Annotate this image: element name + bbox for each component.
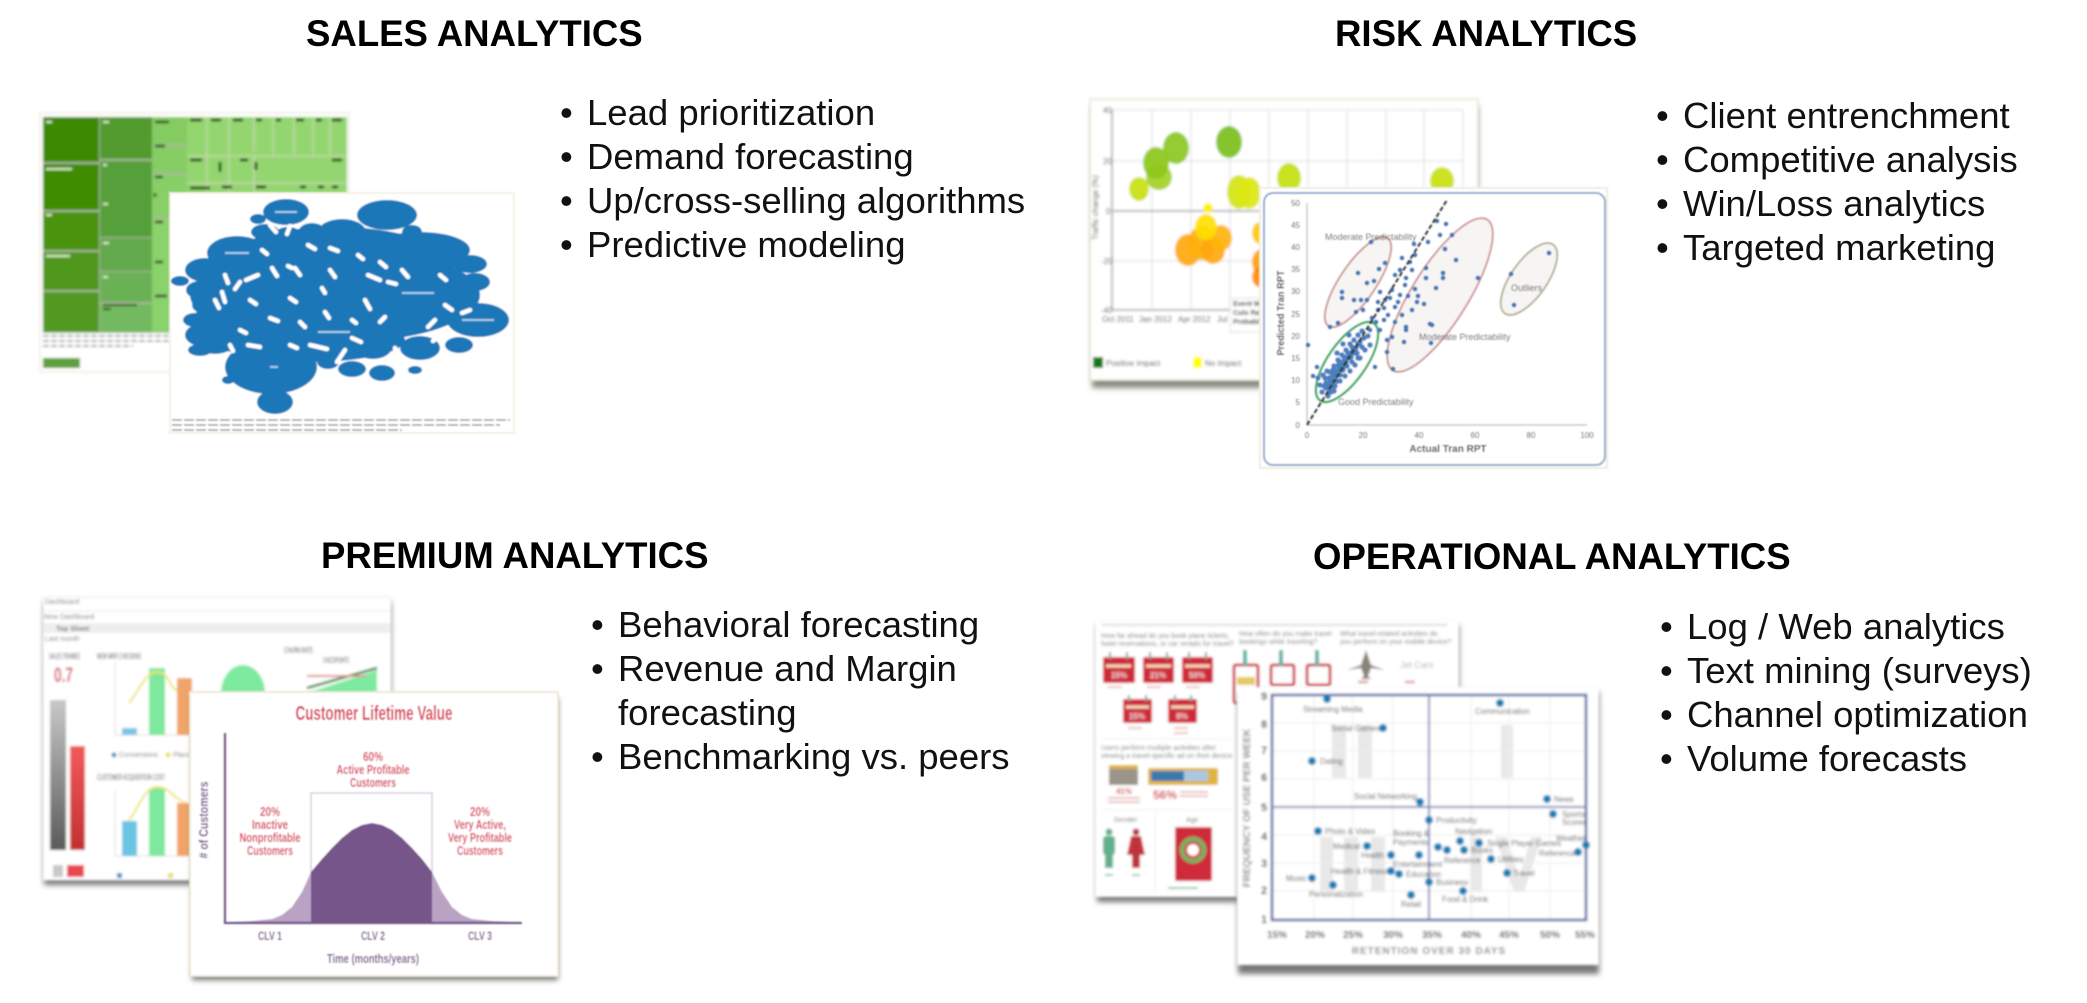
panel: operational infographic screenshot: Jet Cars: [1400, 660, 1434, 670]
bullet list: operational analytics: [1660, 606, 2032, 779]
panel: premium dashboard screenshot: Plans: [173, 752, 191, 759]
bullet list: sales analytics: •: [560, 180, 573, 221]
panel: operational infographic screenshot: How often do you make travel: [1239, 631, 1332, 638]
panel: risk scatter plot: 20: [1291, 332, 1301, 341]
panel: risk scatter plot: 80: [1527, 431, 1536, 440]
bullet list: premium analytics: •: [591, 736, 604, 777]
panel: operational infographic screenshot: 50%: [1189, 671, 1205, 680]
panel: risk bubble chart: Probabil: [1233, 319, 1261, 326]
panel: customer lifetime value chart: Active Profitable: [336, 762, 410, 777]
panel: risk scatter plot: 15: [1291, 354, 1301, 363]
bullet list: sales analytics: [560, 92, 1025, 265]
bullet list: sales analytics: •: [560, 224, 573, 265]
panel: operational infographic screenshot: 15%: [1111, 671, 1127, 680]
panel: operational quadrant chart: 6: [1261, 772, 1267, 784]
panel: operational infographic screenshot: viewing a travel-specific ad on their device: [1101, 753, 1232, 760]
panel: operational quadrant chart: 50%: [1540, 930, 1560, 941]
panel: premium dashboard screenshot: NEW MRR CHECKINS: [97, 652, 141, 661]
heading: operational analytics: OPERATIONAL ANALYTICS: [1313, 536, 1791, 577]
panel: operational quadrant chart: FREQUENCY OF USE PER WEEK: [1242, 728, 1253, 887]
panel: operational quadrant chart: 30%: [1383, 930, 1403, 941]
panel: operational infographic screenshot: Age: [1186, 817, 1199, 824]
panel: operational quadrant chart: 3: [1261, 858, 1267, 870]
bullet list: sales analytics: •: [560, 136, 573, 177]
panel: operational infographic screenshot: 41%: [1116, 787, 1132, 796]
panel: risk scatter plot: Good Predictability: [1338, 397, 1414, 407]
panel: risk scatter plot: 40: [1415, 431, 1424, 440]
panel: customer lifetime value chart: CLV 1: [258, 929, 282, 943]
panel: operational quadrant chart: Medical: [1333, 842, 1360, 851]
bullet list: premium analytics: Revenue and Margin: [618, 648, 957, 689]
panel: operational quadrant chart: Utilities: [1498, 855, 1523, 864]
bullet list: operational analytics: Channel optimization: [1687, 694, 2028, 735]
panel: operational quadrant chart: 55%: [1575, 930, 1595, 941]
panel: operational quadrant chart: 9: [1261, 691, 1267, 703]
panel: risk bubble chart: Traffic change (%): [1091, 175, 1100, 240]
panel: operational quadrant chart: Education: [1406, 870, 1441, 879]
panel: operational infographic screenshot: Users perform multiple activities after: [1101, 745, 1217, 752]
panel: risk scatter plot: 45: [1291, 221, 1301, 230]
panel: customer lifetime value chart: Very Profitable: [448, 830, 512, 845]
panel: risk bubble chart: -20: [1101, 257, 1113, 266]
panel: risk bubble chart: Jul: [1217, 315, 1227, 324]
bullet list: operational analytics: •: [1660, 738, 1673, 779]
bullet list: operational analytics: •: [1660, 650, 1673, 691]
bullet list: risk analytics: •: [1656, 227, 1669, 268]
panel: risk bubble chart: Jan 2012: [1139, 315, 1172, 324]
bullet list: premium analytics: forecasting: [618, 692, 797, 733]
panel: operational quadrant chart: Photo & Video: [1325, 827, 1376, 836]
panel: risk scatter plot: Outliers: [1511, 283, 1543, 293]
panel: premium dashboard screenshot: Dashboard: [45, 599, 79, 606]
bullet list: risk analytics: [1656, 95, 2018, 268]
panel: risk scatter plot: 100: [1580, 431, 1594, 440]
bullet list: premium analytics: Behavioral forecasting: [618, 604, 979, 645]
panel: operational quadrant chart: Entertainment: [1393, 860, 1443, 869]
bullet list: premium analytics: •: [591, 604, 604, 645]
panel: operational quadrant chart: Health & Fitness: [1331, 867, 1389, 876]
panel: operational infographic screenshot: hotel reservations, or car rentals for travel?: [1101, 641, 1234, 648]
panel: operational quadrant chart: 2: [1261, 885, 1267, 897]
panel: operational quadrant chart: 20%: [1305, 930, 1325, 941]
panel: operational quadrant chart: Booking &: [1393, 829, 1430, 838]
panel: risk scatter plot: Actual Tran RPT: [1409, 444, 1487, 455]
heading: risk analytics: RISK ANALYTICS: [1335, 13, 1637, 54]
panel: operational infographic screenshot: you perform on your mobile device?: [1340, 639, 1451, 646]
panel: customer lifetime value chart: 60%: [363, 749, 383, 764]
panel: customer lifetime value chart: CLV 3: [468, 929, 492, 943]
panel: operational quadrant chart: RETENTION OVER 30 DAYS: [1352, 946, 1506, 957]
panel: customer lifetime value chart: Very Active,: [454, 817, 506, 832]
bullet list: risk analytics: Targeted marketing: [1683, 227, 1995, 268]
panel: risk scatter plot: 35: [1291, 265, 1301, 274]
bullet list: risk analytics: Win/Loss analytics: [1683, 183, 1985, 224]
panel: operational infographic screenshot: 15%: [1129, 712, 1145, 721]
panel: risk scatter plot: Moderate Predictability: [1419, 332, 1511, 342]
panel: risk scatter plot: 30: [1291, 287, 1301, 296]
panel: operational quadrant chart: 5: [1261, 802, 1267, 814]
bullet list: risk analytics: •: [1656, 139, 1669, 180]
panel: premium dashboard screenshot: 0.7: [54, 664, 73, 687]
panel: customer lifetime value chart: CLV 2: [361, 929, 385, 943]
panel: operational quadrant chart: Scores: [1562, 818, 1587, 827]
panel: operational quadrant chart: 4: [1261, 831, 1268, 843]
panel: premium dashboard screenshot: [43, 597, 391, 885]
panel: operational infographic screenshot: [1095, 620, 1459, 902]
bullet list: sales analytics: Lead prioritization: [587, 92, 875, 133]
panel: customer lifetime value chart: Customers: [350, 775, 396, 790]
panel: operational infographic screenshot: Gender: [1114, 817, 1138, 824]
bullet list: premium analytics: •: [591, 648, 604, 689]
panel: risk scatter plot: Moderate Predictability: [1325, 232, 1417, 242]
panel: risk bubble chart: Apr 2012: [1178, 315, 1211, 324]
panel: operational quadrant chart: Productivity: [1436, 816, 1477, 825]
panel: operational infographic screenshot: 8%: [1176, 712, 1188, 721]
bullet list: risk analytics: •: [1656, 95, 1669, 136]
panel: premium dashboard screenshot: CHURN RATE: [284, 646, 313, 655]
panel: operational quadrant chart: Reference: [1539, 849, 1576, 858]
panel: risk bubble chart: No Impact: [1205, 359, 1242, 368]
panel: operational quadrant chart: Communication: [1475, 707, 1530, 716]
panel: operational infographic screenshot: 56%: [1153, 788, 1177, 802]
bullet list: sales analytics: Predictive modeling: [587, 224, 906, 265]
panel: operational quadrant chart: 1: [1261, 914, 1267, 926]
panel: risk scatter plot: 20: [1359, 431, 1368, 440]
panel: premium dashboard screenshot: Top Sheet: [56, 626, 90, 633]
panel: operational infographic screenshot: How far ahead do you book plane tickets,: [1101, 633, 1229, 640]
panel: risk bubble chart: Positive Impact: [1106, 359, 1161, 368]
bullet list: operational analytics: •: [1660, 694, 1673, 735]
heading: sales analytics: SALES ANALYTICS: [306, 13, 643, 54]
panel: operational quadrant chart: News: [1554, 795, 1574, 804]
panel: risk scatter plot: 50: [1291, 199, 1301, 208]
bullet list: premium analytics: Benchmarking vs. peers: [618, 736, 1010, 777]
panel: operational quadrant chart: 8: [1261, 719, 1267, 731]
panel: operational quadrant chart: Sports: [1562, 810, 1585, 819]
panel: operational quadrant chart: 25%: [1343, 930, 1363, 941]
panel: operational quadrant chart: Streaming Media: [1303, 705, 1363, 714]
bullet list: premium analytics: [591, 604, 1010, 777]
panel: risk scatter plot: 0: [1305, 431, 1310, 440]
panel: operational quadrant chart: Health: [1361, 851, 1384, 860]
panel: operational quadrant chart: Personalization: [1309, 890, 1363, 899]
bullet list: sales analytics: •: [560, 92, 573, 133]
panel: risk bubble chart: -40: [1101, 306, 1113, 315]
panel: operational quadrant chart: Navigation: [1455, 827, 1492, 836]
panel: operational quadrant chart: Food & Drink: [1442, 895, 1488, 904]
panel: customer lifetime value chart: Inactive: [252, 817, 288, 832]
panel: operational quadrant chart: 35%: [1422, 930, 1442, 941]
panel: premium dashboard screenshot: New Dashboard: [44, 614, 94, 621]
panel: operational quadrant chart: Single Player Games: [1487, 839, 1561, 848]
bullet list: sales analytics: Demand forecasting: [587, 136, 914, 177]
bullet list: operational analytics: •: [1660, 606, 1673, 647]
panel: operational infographic screenshot: What travel-related activities do: [1340, 631, 1438, 638]
panel: operational quadrant chart: Music: [1286, 874, 1307, 883]
panel: risk scatter plot: [1260, 188, 1607, 468]
panel: operational quadrant chart: 15%: [1267, 930, 1287, 941]
bullet list: risk analytics: Competitive analysis: [1683, 139, 2018, 180]
panel: customer lifetime value chart: 20%: [260, 804, 280, 819]
panel: premium dashboard screenshot: Last month: [45, 636, 80, 643]
panel: risk bubble chart: 0: [1106, 207, 1111, 216]
panel: risk scatter plot: 60: [1471, 431, 1480, 440]
bullet list: risk analytics: •: [1656, 183, 1669, 224]
panel: customer lifetime value chart: 20%: [470, 804, 490, 819]
panel: customer lifetime value chart: [190, 692, 558, 980]
panel: risk bubble chart: Oct 2011: [1102, 315, 1134, 324]
panel: risk bubble chart: Event Ma: [1233, 301, 1264, 308]
panel: operational infographic screenshot: bookings while traveling?: [1239, 639, 1317, 646]
bullet list: risk analytics: Client entrenchment: [1683, 95, 2010, 136]
bullet list: operational analytics: Text mining (surveys): [1687, 650, 2032, 691]
panel: operational quadrant chart: Retail: [1401, 900, 1421, 909]
panel: operational quadrant chart: 45%: [1499, 930, 1519, 941]
panel: risk bubble chart: 20: [1103, 157, 1112, 166]
panel: sales treemap screenshot: [40, 113, 349, 372]
panel: operational quadrant chart: Social Networking: [1354, 792, 1417, 801]
bullet list: sales analytics: Up/cross-selling algorithms: [587, 180, 1025, 221]
panel: risk scatter plot: 10: [1291, 376, 1301, 385]
panel: premium dashboard screenshot: SALES TRAINED: [49, 652, 80, 661]
panel: premium dashboard screenshot: Conversions: [119, 752, 158, 759]
panel: customer lifetime value chart: Customers: [247, 843, 293, 858]
panel: risk scatter plot: 25: [1291, 310, 1301, 319]
panel: operational quadrant chart: Dating: [1320, 757, 1343, 766]
panel: risk scatter plot: 40: [1291, 243, 1301, 252]
panel: sales bubble cloud: [170, 193, 514, 433]
heading: premium analytics: PREMIUM ANALYTICS: [321, 535, 708, 576]
panel: customer lifetime value chart: Customers: [457, 843, 503, 858]
panel: operational quadrant chart: Travel: [1513, 869, 1535, 878]
panel: risk scatter plot: 5: [1296, 398, 1301, 407]
panel: risk bubble chart: 40: [1103, 106, 1112, 115]
panel: risk scatter plot: 0: [1296, 421, 1301, 430]
panel: operational quadrant chart: Business: [1436, 878, 1468, 887]
panel: risk bubble chart: Cuts Rai: [1233, 310, 1261, 317]
panel: operational quadrant chart: Books: [1471, 846, 1493, 855]
panel: operational quadrant chart: Social Games: [1331, 724, 1380, 733]
panel: operational quadrant chart: 7: [1261, 745, 1267, 757]
panel: premium dashboard screenshot: CUSTOMER ACQUISITION COST: [97, 773, 165, 782]
panel: customer lifetime value chart: Nonprofitable: [240, 830, 300, 845]
panel: operational quadrant chart: [1237, 687, 1599, 974]
panel: operational quadrant chart: Payments: [1393, 838, 1428, 847]
panel: customer lifetime value chart: Customer Lifetime Value: [296, 703, 452, 725]
panel: operational quadrant chart: Reference: [1444, 856, 1481, 865]
panel: risk bubble chart: [1090, 99, 1478, 388]
panel: operational quadrant chart: Weather: [1556, 834, 1586, 843]
bullet list: operational analytics: Volume forecasts: [1687, 738, 1967, 779]
panel: operational quadrant chart: 40%: [1461, 930, 1481, 941]
bullet list: operational analytics: Log / Web analytics: [1687, 606, 2005, 647]
panel: premium dashboard screenshot: CHECKPOINTS: [323, 656, 349, 665]
panel: customer lifetime value chart: # of Customers: [196, 782, 211, 858]
panel: customer lifetime value chart: Time (months/years): [327, 951, 419, 966]
panel: operational infographic screenshot: 21%: [1150, 671, 1166, 680]
panel: risk scatter plot: Predicted Tran RPT: [1276, 270, 1287, 356]
